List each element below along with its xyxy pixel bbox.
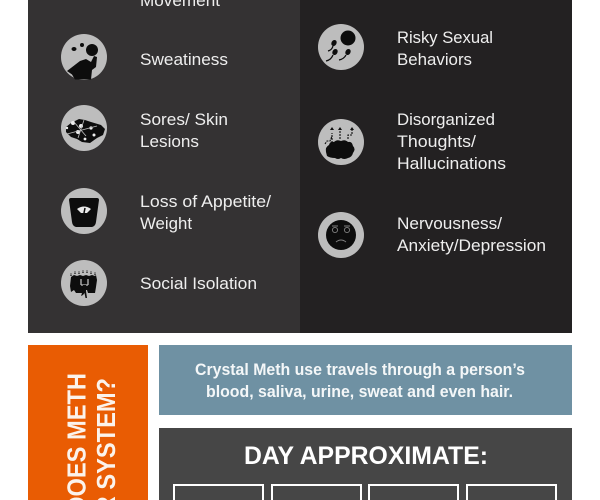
panel: orange side heading — [28, 345, 148, 500]
text: nervousness, anxiety and depression: Anxiety/Depression — [397, 236, 546, 255]
icon: sperm and egg — [318, 24, 364, 70]
text: sweatiness: Sweatiness — [140, 50, 228, 69]
panel: physical signs — [28, 0, 300, 333]
icon: brain with arrows — [318, 119, 364, 165]
text: sores and skin lesions — [140, 110, 228, 151]
text: risky sexual behaviors — [397, 28, 493, 69]
text: sores and skin lesions: Sores/ Skin — [140, 110, 228, 129]
icon: sweating person — [61, 34, 107, 80]
icon: person isolated in crowd — [61, 260, 107, 306]
text: disorganized thoughts and hallucinations: Disorganized — [397, 110, 495, 129]
text: social isolation: Social Isolation — [140, 274, 257, 293]
text: loss of appetite and weight: Loss of Appetite/ — [140, 192, 271, 211]
icon: skin sores — [61, 105, 107, 151]
text: loss of appetite and weight — [140, 192, 271, 233]
text: sores and skin lesions: Lesions — [140, 132, 199, 151]
text: loss of appetite and weight: Weight — [140, 214, 192, 233]
text: nervousness, anxiety and depression: Nervousness/ — [397, 214, 502, 233]
text: disorganized thoughts and hallucinations: Thoughts/ — [397, 132, 476, 151]
text: disorganized thoughts and hallucinations: Hallucinations — [397, 154, 506, 173]
panel: behavioral signs — [300, 0, 572, 333]
panel: day approximate — [159, 428, 572, 500]
icon: worried face — [318, 212, 364, 258]
heading: does meth, your system — [64, 373, 121, 500]
icon: weight scale — [61, 188, 107, 234]
text: nervousness, anxiety and depression — [397, 214, 546, 255]
text: risky sexual behaviors: Behaviors — [397, 50, 472, 69]
callout: how meth travels: Crystal Meth use travels through a person’s — [195, 360, 525, 379]
callout: how meth travels — [159, 345, 572, 415]
text: risky sexual behaviors: Risky Sexual — [397, 28, 493, 47]
text: disorganized thoughts and hallucinations — [397, 110, 506, 173]
heading: day approximate: DAY APPROXIMATE: — [244, 442, 488, 470]
callout: how meth travels: blood, saliva, urine, sweat and even hair. — [206, 382, 513, 401]
detection day boxes — [174, 485, 556, 500]
